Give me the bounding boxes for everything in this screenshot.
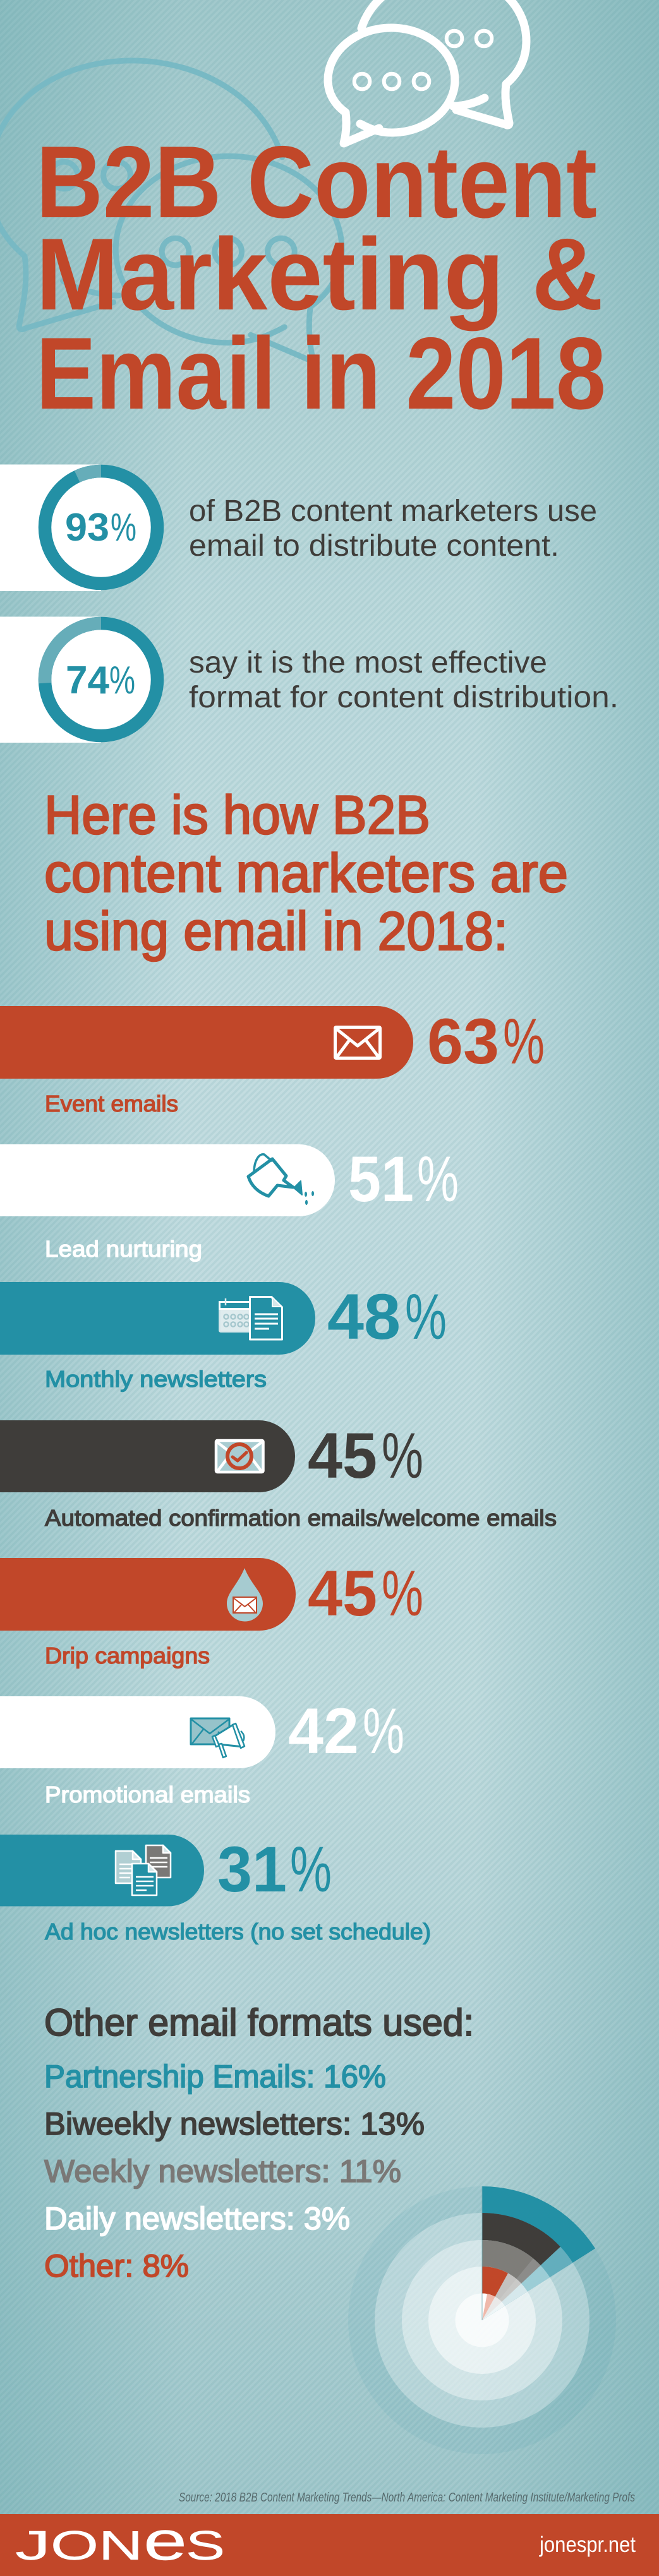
section heading: [44, 785, 568, 962]
logo: J: [15, 2522, 51, 2568]
value: %: [363, 1695, 404, 1767]
label: Lead nurturing: [45, 1236, 202, 1262]
label: Monthly newsletters: [45, 1366, 267, 1392]
value: %: [382, 1420, 423, 1492]
label: Automated confirmation emails/welcome emails: [45, 1505, 557, 1531]
bar: drip campaigns 45 percent: [0, 1557, 423, 1668]
bar: ad hoc newsletters 31 percent: [0, 1833, 431, 1944]
value 93 percent: [65, 506, 136, 549]
bar: event emails 63 percent: [0, 1005, 545, 1117]
list: other email formats: Biweekly newsletters: 13%: [44, 2106, 425, 2142]
donut chart 93 percent: [44, 470, 158, 584]
icon: drop with envelope: [227, 1568, 263, 1621]
bar: automated confirmation emails 45 percent: [0, 1420, 557, 1531]
value: [327, 1281, 447, 1353]
icon: calendar and document: [220, 1297, 282, 1339]
section heading: using email in 2018:: [44, 901, 508, 962]
stat text 74 percent: say it is the most effective: [189, 646, 547, 680]
stat text 93 percent: email to distribute content.: [189, 529, 559, 563]
title: [36, 125, 606, 431]
segment: partnership emails 16 percent: [482, 2186, 595, 2320]
title: B2B Content: [36, 125, 597, 239]
value: %: [503, 1005, 545, 1077]
icon: watering can: [248, 1154, 314, 1205]
logo: e: [143, 2511, 187, 2572]
value: [217, 1833, 332, 1905]
value: [288, 1695, 404, 1767]
stat: 93 percent: [0, 465, 597, 591]
section heading: content marketers are: [44, 843, 568, 904]
value 74 percent: [66, 659, 135, 702]
value: 31: [217, 1833, 287, 1905]
radial chart: [348, 2186, 616, 2454]
value 74 percent: %: [109, 659, 135, 702]
value: [308, 1420, 423, 1492]
icon: envelope with check: [216, 1441, 263, 1472]
list: other email formats: Partnership Emails: 16%: [44, 2059, 386, 2094]
stat text 93 percent: of B2B content marketers use: [189, 494, 597, 528]
stat text 74 percent: format for content distribution.: [189, 681, 619, 714]
concentric rings: [348, 2186, 616, 2454]
white strip: [0, 465, 101, 591]
footer band: [0, 2511, 659, 2576]
icon: envelope and megaphone: [191, 1718, 245, 1758]
donut chart 74 percent: [44, 623, 158, 736]
bar: promotional emails 42 percent: [0, 1695, 404, 1807]
value 93 percent: 93: [65, 506, 109, 549]
value 93 percent: %: [111, 506, 136, 549]
bar: lead nurturing 51 percent: [0, 1143, 459, 1262]
value: %: [290, 1833, 332, 1905]
value: [308, 1557, 423, 1629]
label: Event emails: [45, 1091, 178, 1117]
stat text 93 percent: [189, 494, 597, 563]
logo: O: [51, 2522, 99, 2568]
value: 45: [308, 1420, 377, 1492]
segments: daily newsletters 3 percent: [482, 2186, 505, 2320]
segments: other 8 percent: [482, 2267, 528, 2320]
label: Drip campaigns: [45, 1643, 210, 1668]
logo: S: [186, 2522, 225, 2568]
logo: N: [99, 2522, 143, 2568]
website: jonespr.net: [539, 2532, 636, 2557]
label: Ad hoc newsletters (no set schedule): [45, 1919, 431, 1944]
decorative ghost speech bubbles: [0, 61, 342, 362]
icon: white speech bubbles: [328, 0, 526, 143]
segments: weekly newsletters 11 percent: [482, 2240, 550, 2320]
title: Marketing &: [36, 217, 603, 332]
icon: envelope: [335, 1027, 380, 1058]
logo: [15, 2511, 225, 2572]
value: 48: [327, 1281, 401, 1353]
stat text 74 percent: [189, 646, 619, 714]
value: [427, 1005, 545, 1077]
list: other email formats: Other: 8%: [44, 2248, 189, 2284]
white strip: [0, 616, 101, 743]
bar: monthly newsletters 48 percent: [0, 1281, 447, 1392]
list: other email formats: [44, 2059, 425, 2284]
list: other email formats: Weekly newsletters: 11%: [44, 2154, 401, 2189]
value 74 percent: 74: [66, 659, 110, 702]
value: %: [405, 1281, 447, 1353]
section heading: Here is how B2B: [44, 785, 430, 846]
value: [348, 1143, 459, 1215]
value: %: [417, 1143, 459, 1215]
list: other email formats: Daily newsletters: 3%: [44, 2201, 350, 2236]
icon: stacked documents: [116, 1845, 171, 1895]
value: %: [382, 1557, 423, 1629]
value: 42: [288, 1695, 359, 1767]
stat: 74 percent: [0, 616, 619, 743]
label: Promotional emails: [45, 1782, 250, 1807]
heading: other email formats: Other email formats used:: [44, 2001, 474, 2044]
value: 45: [308, 1557, 377, 1629]
value: 51: [348, 1143, 414, 1215]
segments: biweekly newsletters 13 percent: [482, 2213, 572, 2320]
value: 63: [427, 1005, 499, 1077]
